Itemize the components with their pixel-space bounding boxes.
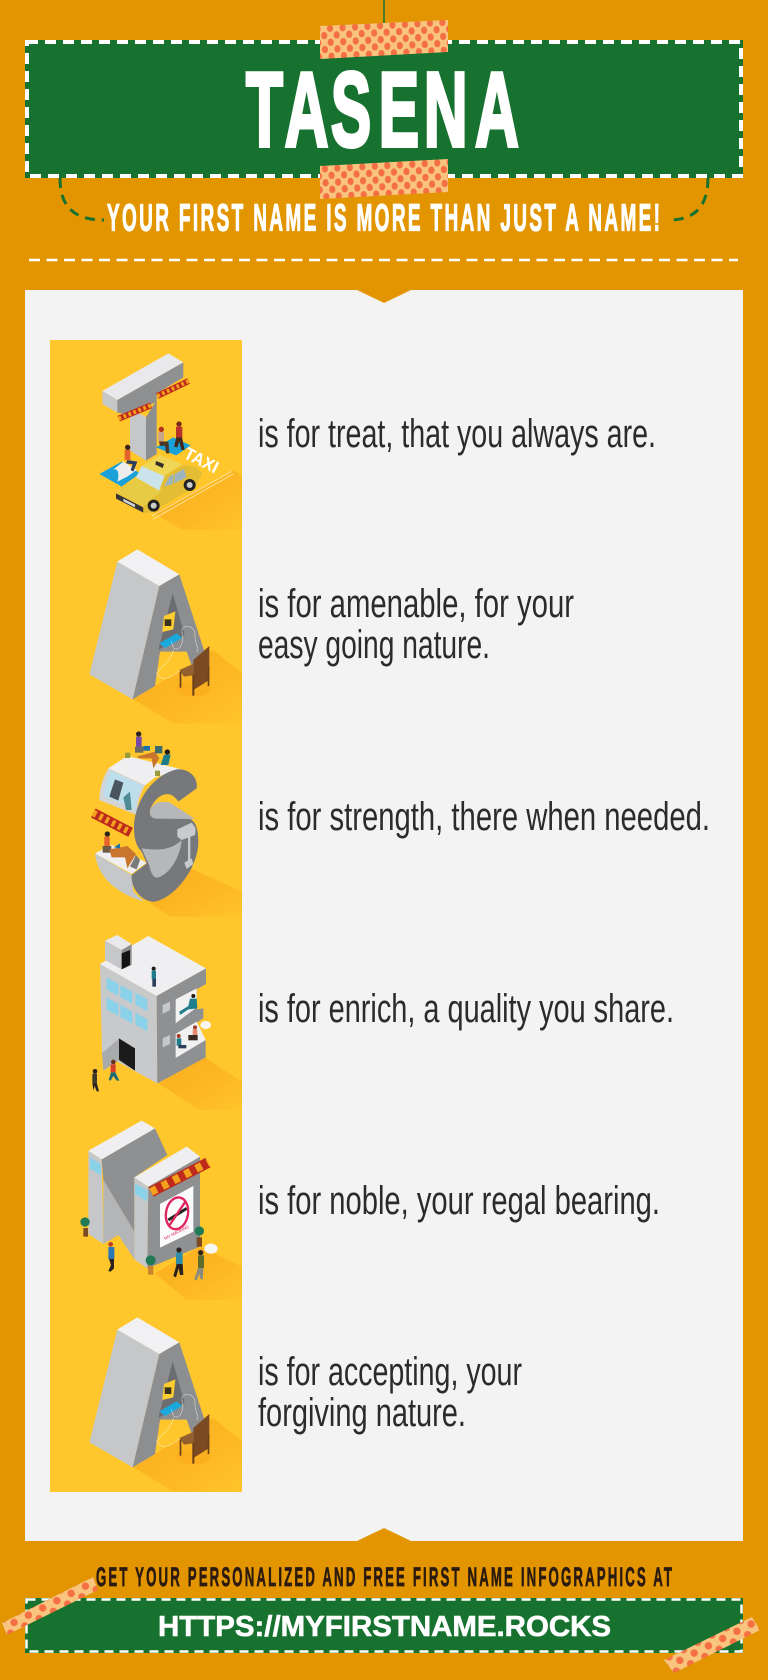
- no smoking sign: [160, 1186, 193, 1248]
- figures: [103, 731, 171, 869]
- footer call to action: GET YOUR PERSONALIZED AND FREE FIRST NAME INFOGRAPHICS AT: [96, 1563, 672, 1592]
- line: A (second): is for accepting, your: [258, 1350, 522, 1394]
- footer URL banner: [25, 1598, 743, 1653]
- title: TASENA: [246, 51, 519, 169]
- icon: letter T taxi stand: [99, 353, 242, 530]
- url: HTTPS://MYFIRSTNAME.ROCKS: [158, 1611, 611, 1643]
- figures: [125, 421, 185, 472]
- left dashed connector: [60, 178, 104, 220]
- icon: letter N storefront: [80, 1121, 242, 1300]
- yellow illustration column: [50, 340, 242, 1492]
- tagline: YOUR FIRST NAME IS MORE THAN JUST A NAME!: [107, 198, 660, 239]
- tape: top: [320, 20, 448, 59]
- hanging string: [383, 0, 385, 24]
- icon: letter A: [89, 549, 242, 723]
- line: A: easy going nature.: [258, 623, 490, 667]
- icon: letter S office: [93, 731, 242, 917]
- panel: letters and meanings: [25, 290, 743, 1541]
- line: A: is for amenable, for your: [258, 582, 574, 626]
- plants and people: [80, 1217, 218, 1281]
- line: A: [258, 582, 574, 667]
- tape: footer left: [2, 1577, 98, 1635]
- line: A (second): forgiving nature.: [258, 1391, 466, 1435]
- figures: [92, 967, 211, 1091]
- title banner: [25, 40, 743, 178]
- tape: footer right: [664, 1617, 760, 1673]
- icon: letter A (second): [89, 1317, 242, 1491]
- right dashed connector: [669, 178, 708, 220]
- taxi: [116, 455, 202, 513]
- tape: below title: [320, 159, 448, 199]
- no smoking sign: NO SMOKING: [163, 1224, 190, 1241]
- line: A (second): [258, 1350, 522, 1435]
- icon: letter T taxi stand: TAXI: [181, 443, 222, 477]
- icon: letter E building: [92, 935, 242, 1110]
